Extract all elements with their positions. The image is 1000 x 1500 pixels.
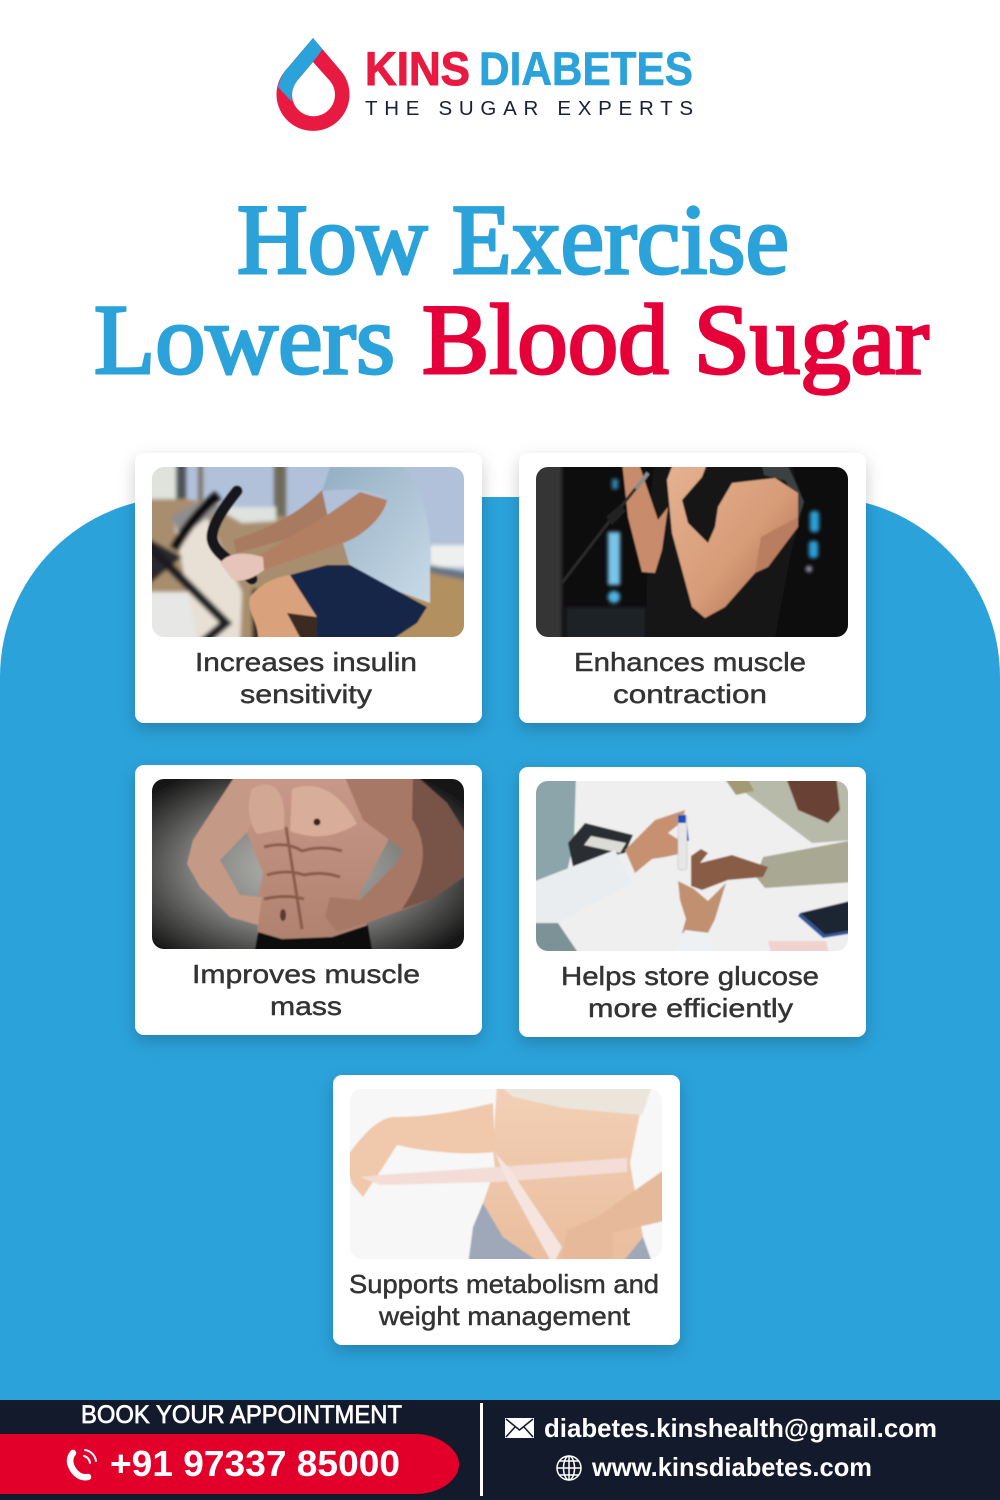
divider (480, 1403, 483, 1496)
caption: contraction (613, 679, 767, 709)
background: blue rounded panel (0, 497, 1000, 1400)
phone number: +91 97337 85000 (110, 1443, 400, 1484)
website address: www.kinsdiabetes.com (591, 1452, 872, 1482)
footer bar (0, 1400, 1000, 1500)
caption: Increases insulin (195, 647, 417, 677)
caption (349, 1269, 659, 1331)
photo: finger-prick glucose test (536, 781, 848, 951)
caption: Enhances muscle (574, 647, 806, 677)
title: How Exercise (237, 184, 789, 295)
title (94, 184, 929, 395)
email address: diabetes.kinshealth@gmail.com (544, 1413, 937, 1443)
icon: envelope (505, 1418, 534, 1438)
photo: flexed arm at gym (536, 467, 848, 637)
caption: Supports metabolism and (349, 1269, 659, 1299)
caption (561, 961, 819, 1023)
caption: more efficiently (588, 993, 793, 1023)
logo wordmark: DIABETES: DIABETES (479, 42, 693, 95)
photo: waist with measuring tape (350, 1089, 662, 1259)
caption (574, 647, 806, 709)
phone pill (0, 1434, 459, 1494)
panel: helps store glucose more efficiently (519, 767, 866, 1037)
photo: muscular torso (152, 779, 464, 949)
caption: mass (270, 991, 342, 1021)
logo wordmark: KINS: KINS (365, 42, 470, 95)
panel: enhances muscle contraction (519, 453, 866, 723)
logo: Kins Diabetes (276, 38, 693, 131)
icon: globe (557, 1456, 581, 1480)
footer heading: book your appointment: BOOK YOUR APPOINTMENT (81, 1401, 402, 1429)
caption: Helps store glucose (561, 961, 819, 991)
panel: supports metabolism and weight management (333, 1075, 680, 1345)
caption: weight management (378, 1301, 631, 1331)
caption (192, 959, 420, 1021)
caption: sensitivity (240, 679, 372, 709)
logo tagline: THE SUGAR EXPERTS (365, 97, 693, 120)
icon: blood drop (276, 38, 349, 131)
panel: improves muscle mass (135, 765, 482, 1035)
photo: man on exercise bike (152, 467, 464, 637)
panel: increases insulin sensitivity (135, 453, 482, 723)
title: Blood Sugar (422, 284, 929, 395)
caption (195, 647, 417, 709)
caption: Improves muscle (192, 959, 420, 989)
icon: phone (70, 1450, 96, 1477)
title: Lowers (94, 284, 395, 395)
